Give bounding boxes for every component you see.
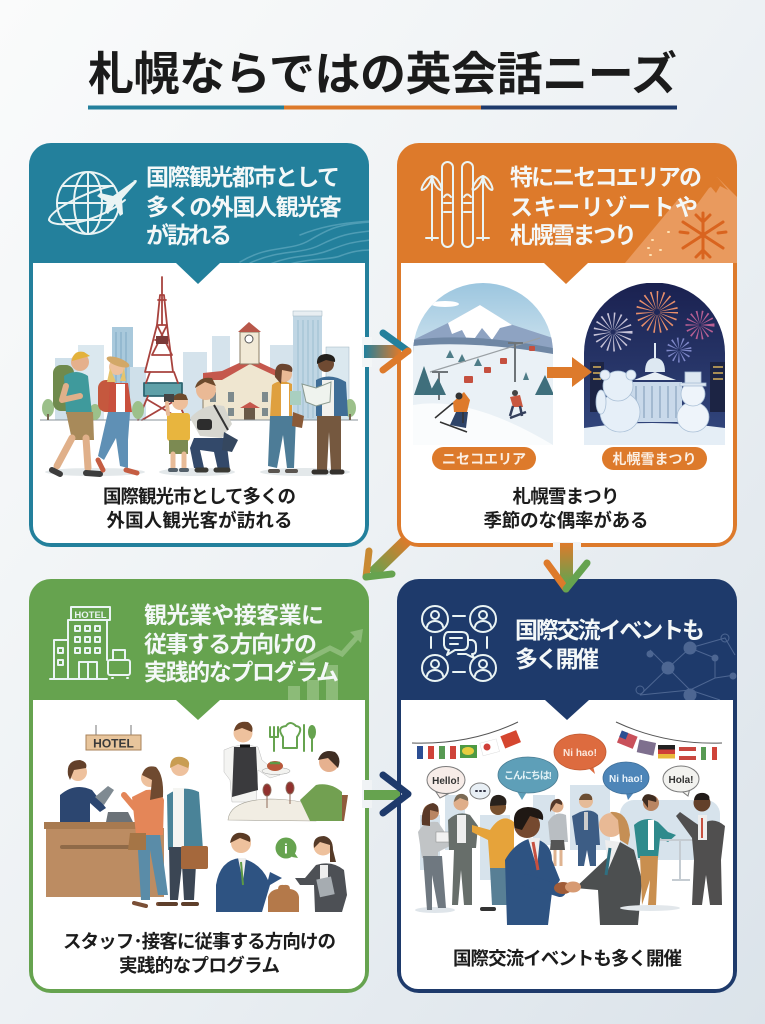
arrow: ski resort to hospitality <box>366 540 407 577</box>
caption: 国際観光市として多くの <box>103 486 296 507</box>
caption: 実践的なプログラム <box>119 955 280 976</box>
city skyline <box>55 311 349 420</box>
label: Snow Festival: 札幌雪まつり <box>612 451 696 467</box>
heading: 実践的なプログラム <box>144 659 339 685</box>
bubble: Hello: Hello! <box>432 776 460 787</box>
panel: hospitality program <box>29 579 369 993</box>
snow bear <box>596 370 640 432</box>
heading: 特にニセコエリアの <box>510 164 702 190</box>
person: woman in teal <box>620 794 680 911</box>
heading: 観光業や接客業に <box>144 602 324 628</box>
bubble: Ni hao orange: Ni hao! <box>563 748 597 759</box>
bubble: Hola <box>663 766 699 796</box>
person: crouching photographer <box>190 378 238 470</box>
person: man in orange sweater <box>472 795 514 909</box>
fireworks <box>602 300 708 357</box>
caption: 札幌雪まつり <box>512 486 620 507</box>
guest woman <box>124 766 168 906</box>
info icon: i <box>284 840 288 856</box>
bubble: dots <box>470 783 490 799</box>
person: man in grey suit <box>676 793 725 905</box>
caption <box>484 486 648 531</box>
illustration: Sapporo Snow Festival <box>584 283 726 445</box>
illustration: tourists in Sapporo <box>40 277 358 476</box>
guest man <box>160 757 208 904</box>
bubble: Konnichiwa: こんにちは! <box>504 770 552 782</box>
heading: が訪れる <box>146 222 232 248</box>
label: Niseko <box>432 447 536 470</box>
icon: skis and poles <box>422 162 493 247</box>
hotel sign <box>86 725 141 750</box>
dining icons <box>270 723 315 751</box>
cocktail table <box>660 840 700 880</box>
panel: ski resort and snow festival <box>397 143 740 547</box>
caption: 外国人観光客が訪れる <box>106 510 292 531</box>
bubble: Ni hao orange <box>554 734 606 774</box>
bubble: Hello <box>427 766 465 798</box>
arrow: hospitality to events <box>362 775 408 813</box>
staff man <box>216 833 282 912</box>
panel: international events <box>397 579 737 993</box>
clock tower building <box>203 322 286 420</box>
icon: hotel and luggage: HOTEL <box>74 610 107 621</box>
left flags <box>412 722 521 759</box>
background silhouettes <box>420 785 720 880</box>
receptionist <box>60 760 114 822</box>
heading <box>144 602 339 685</box>
person: right man handshake <box>565 812 642 925</box>
illustration: international networking <box>412 722 725 925</box>
person: woman with phone <box>268 364 304 471</box>
person: woman with hat <box>98 354 137 473</box>
heading: 多くの外国人観光客 <box>146 194 342 220</box>
heading: 従事する方向けの <box>144 631 317 657</box>
label: Niseko: ニセコエリア <box>442 451 526 467</box>
heading: 国際交流イベントも <box>515 617 705 643</box>
info icon <box>276 838 298 858</box>
heading: 札幌雪まつり <box>510 222 637 248</box>
skier in orange <box>435 392 470 432</box>
Sapporo TV tower <box>138 277 186 420</box>
hotel sign: HOTEL <box>93 736 134 750</box>
person: man in blue at back <box>572 794 600 866</box>
panel: international tourism <box>29 143 370 547</box>
caption: スタッフ･接客に従事する方向けの <box>63 931 336 952</box>
illustration: Niseko ski area <box>413 283 554 445</box>
bubble: Hola: Hola! <box>668 775 694 786</box>
right flags <box>616 722 722 760</box>
caption <box>63 931 336 976</box>
skier in red <box>510 390 526 418</box>
icon: networked people <box>422 606 496 681</box>
title: 札幌ならではの英会話ニーズ <box>88 48 677 100</box>
title underline <box>88 106 677 110</box>
person: child with camera <box>164 393 190 470</box>
label: Snow Festival <box>602 447 707 470</box>
caption: 季節のな偶率がある <box>484 510 648 531</box>
reception counter <box>44 812 164 897</box>
person: man at back left <box>448 794 478 905</box>
bubble: Konnichiwa <box>498 757 558 800</box>
staff woman <box>295 836 347 912</box>
caption: 国際交流イベントも多く開催 <box>453 948 682 969</box>
bubble: Ni hao blue <box>603 762 649 800</box>
illustration: hotel front desk <box>44 722 348 912</box>
person: woman with notes <box>415 803 455 913</box>
heading <box>146 164 342 248</box>
snowman <box>677 372 709 432</box>
dining table and guest <box>228 751 348 821</box>
arrow between scenes <box>547 357 592 387</box>
ground and trees <box>40 399 358 476</box>
heading <box>515 617 705 672</box>
waiter <box>224 722 290 802</box>
heading: スキーリゾートや <box>510 194 698 220</box>
caption <box>103 486 296 531</box>
icon: hotel and luggage <box>50 607 130 679</box>
heading: 国際観光都市として <box>146 164 340 190</box>
bag <box>268 885 299 912</box>
arrow: tourism to ski resort <box>362 333 408 370</box>
heading <box>510 164 702 248</box>
icon: globe and plane <box>49 172 137 234</box>
person: left man handshake <box>505 807 572 925</box>
arrow: ski resort to events <box>547 542 587 589</box>
bubble: Ni hao blue: Ni hao! <box>609 774 643 785</box>
person: hiker <box>52 352 100 474</box>
person: woman at back <box>548 799 568 866</box>
person: man with map <box>302 354 348 472</box>
heading: 多く開催 <box>515 646 599 672</box>
